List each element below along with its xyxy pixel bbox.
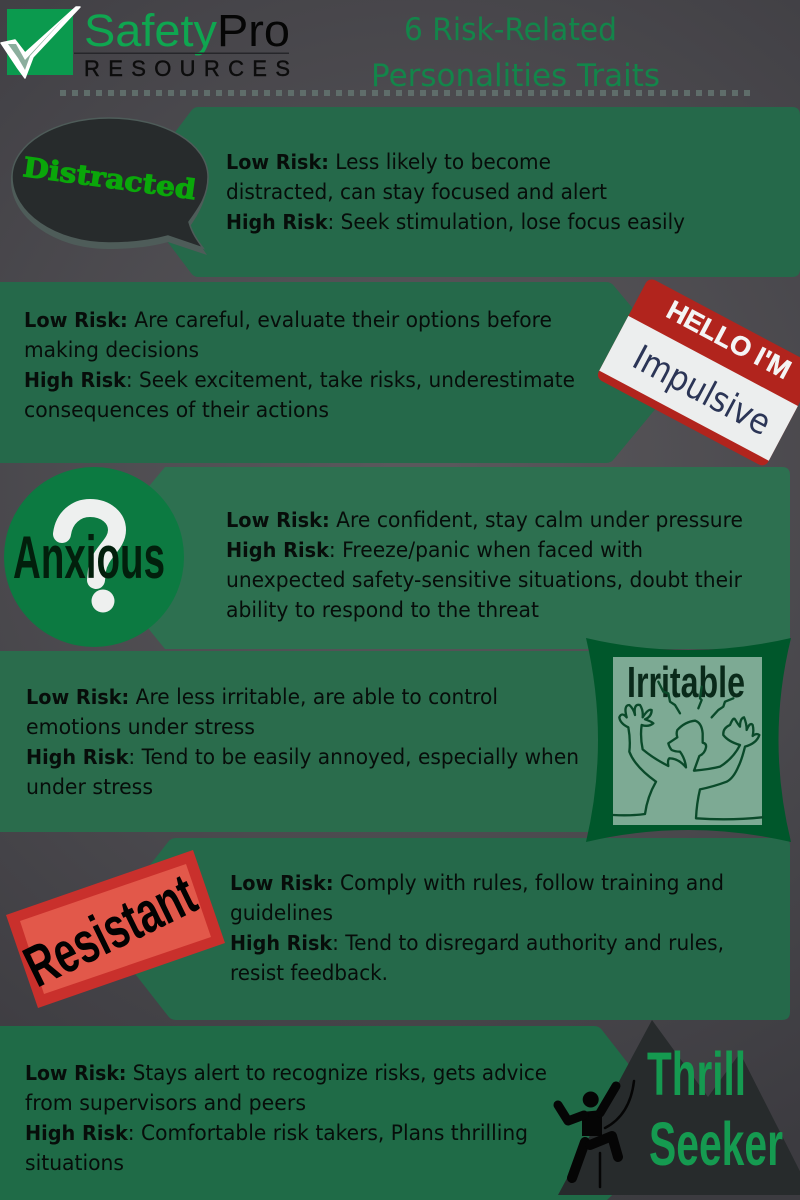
text: impulsive risks: making decisions xyxy=(24,338,199,363)
text: irritable risks: Low Risk: Are less irritable, are able to control xyxy=(26,685,498,710)
text: thrill seeker risks xyxy=(25,1061,547,1176)
title: Personalities Traits xyxy=(371,58,660,94)
text: anxious risks xyxy=(226,508,743,623)
icon: resistant sign: Resistant xyxy=(14,861,206,1000)
panel: irritable xyxy=(0,651,620,832)
icon: name tag: Impulsive xyxy=(626,338,777,444)
text: distracted risks: distracted, can stay focused and alert xyxy=(226,180,607,205)
icon: irritable frame: Irritable xyxy=(627,658,745,707)
text: resistant risks: Low Risk: Comply with rules, follow training and xyxy=(230,871,724,896)
text: impulsive risks: Low Risk: Are careful, evaluate their options before xyxy=(24,308,552,333)
heading: thrill seeker xyxy=(647,1040,783,1178)
icon: climber xyxy=(558,1081,634,1187)
icon: name tag xyxy=(595,277,800,468)
logo: SafetyPro Resources: RESOURCES xyxy=(84,56,290,81)
title xyxy=(371,12,660,94)
text: irritable risks xyxy=(26,685,579,800)
icon: speech bubble xyxy=(11,118,208,255)
panel: distracted xyxy=(11,107,800,277)
text: irritable risks: High Risk: Tend to be easily annoyed, especially when xyxy=(26,745,579,770)
text: thrill seeker risks: High Risk: Comfortable risk takers, Plans thrilling xyxy=(25,1121,528,1146)
text: irritable risks: emotions under stress xyxy=(26,715,255,740)
text: impulsive risks: High Risk: Seek excitement, take risks, underestimate xyxy=(24,368,575,393)
text: resistant risks xyxy=(230,871,724,986)
text: anxious risks: ability to respond to the threat xyxy=(226,598,539,623)
text: irritable risks: under stress xyxy=(26,775,153,800)
panel: resistant xyxy=(6,838,790,1020)
text: anxious risks: Low Risk: Are confident, stay calm under pressure xyxy=(226,508,743,533)
icon: resistant sign xyxy=(6,850,225,1008)
icon: angry person xyxy=(613,682,762,819)
text: resistant risks: resist feedback. xyxy=(230,961,388,986)
text: anxious risks: unexpected safety-sensitive situations, doubt their xyxy=(226,568,742,593)
icon: name tag: HELLO I'M xyxy=(662,295,796,385)
text: impulsive risks: consequences of their actions xyxy=(24,398,329,423)
title: 6 Risk-Related xyxy=(404,12,617,48)
text: distracted risks: Low Risk: Less likely to become xyxy=(226,150,551,175)
text: impulsive risks xyxy=(24,308,575,423)
panel: anxious xyxy=(4,467,790,649)
icon: irritable frame xyxy=(586,638,791,842)
icon: question circle: Anxious xyxy=(13,524,165,591)
text: thrill seeker risks: Low Risk: Stays alert to recognize risks, gets advice xyxy=(25,1061,547,1086)
text: thrill seeker risks: from supervisors and peers xyxy=(25,1091,306,1116)
text: thrill seeker risks: situations xyxy=(25,1151,124,1176)
logo: SafetyPro Resources: SafetyPro xyxy=(84,5,290,56)
panel: impulsive xyxy=(0,277,800,468)
text: distracted risks: High Risk: Seek stimulation, lose focus easily xyxy=(226,210,685,235)
icon: speech bubble: Distracted xyxy=(21,152,198,206)
icon: question circle xyxy=(4,467,184,647)
logo: SafetyPro Resources xyxy=(1,5,290,81)
text: resistant risks: guidelines xyxy=(230,901,333,926)
text: resistant risks: High Risk: Tend to disregard authority and rules, xyxy=(230,931,724,956)
text: distracted risks xyxy=(226,150,685,235)
text: anxious risks: High Risk: Freeze/panic when faced with xyxy=(226,538,643,563)
heading: thrill seeker: Thrill xyxy=(647,1040,746,1108)
icon: mountain and climber xyxy=(558,1020,800,1195)
panel: thrill seeker xyxy=(0,1026,680,1200)
